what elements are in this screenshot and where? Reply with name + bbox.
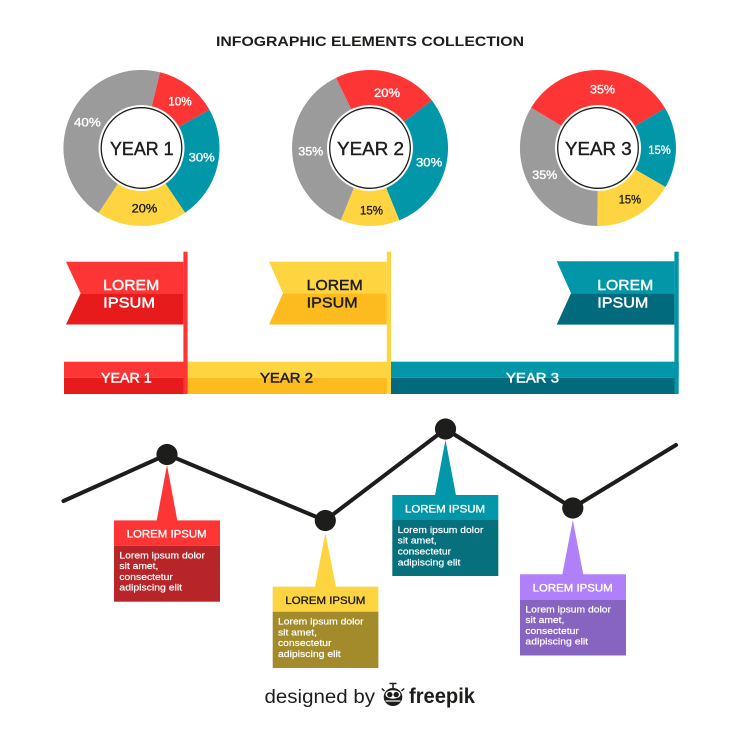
- slice: teal 30%: [142, 110, 220, 213]
- data point 1: [156, 444, 178, 465]
- slice: gray 40%: [63, 70, 160, 213]
- center ring: [327, 105, 413, 191]
- label: 15%: 15%: [360, 204, 383, 218]
- donut chart: year 2: [292, 70, 448, 226]
- label: 30%: 30%: [416, 156, 443, 170]
- label: 40%: 40%: [74, 116, 101, 130]
- flag: year 1: [66, 252, 188, 394]
- designed by text: designed by: [264, 686, 375, 708]
- slice: yellow 15%: [597, 148, 666, 226]
- callout: yellow: adipiscing elit: [278, 649, 341, 659]
- callout: red: consectetur: [119, 572, 173, 582]
- slice: gray 35%: [292, 78, 370, 220]
- label: year 2: YEAR 2: [337, 139, 404, 159]
- callout: teal: [392, 440, 498, 576]
- label: year 3: YEAR 3: [565, 139, 632, 159]
- callout: yellow: [273, 533, 378, 668]
- callout: yellow: consectetur: [278, 638, 331, 648]
- timeline segment: year 3: YEAR 3: [506, 370, 559, 386]
- line chart: [64, 418, 676, 531]
- callout: yellow: sit amet,: [278, 627, 317, 637]
- callout: yellow: Lorem ipsum dolor: [278, 617, 364, 627]
- data point 4: [562, 497, 583, 519]
- label: 20%: 20%: [132, 201, 158, 215]
- donut chart: year 3: [520, 70, 676, 226]
- trend line: [64, 429, 676, 520]
- callout: purple: consectetur: [525, 626, 579, 636]
- label: 35% gray: 35%: [532, 168, 558, 182]
- timeline segment: year 3: [391, 362, 679, 394]
- callout: purple: [520, 520, 626, 656]
- label: 15% yellow: 15%: [619, 192, 641, 206]
- flag: year 1: LOREM: [103, 277, 159, 294]
- label: 30%: 30%: [189, 151, 215, 165]
- footer credit: [264, 684, 475, 708]
- callout: red: sit amet,: [119, 561, 158, 571]
- center ring: [98, 105, 184, 191]
- flag timeline: [64, 252, 679, 394]
- label: year 1: YEAR 1: [110, 139, 174, 159]
- callout: purple: LOREM IPSUM: [533, 583, 613, 595]
- timeline segment: year 2: [188, 362, 391, 394]
- slice: yellow 15%: [341, 148, 399, 226]
- callout: teal: Lorem ipsum dolor: [398, 525, 483, 535]
- flag: year 3: LOREM: [597, 277, 653, 294]
- flag: year 3: IPSUM: [597, 294, 648, 312]
- callout: purple: adipiscing elit: [525, 637, 589, 647]
- callout: red: Lorem ipsum dolor: [119, 550, 205, 560]
- slice: gray 35%: [520, 108, 598, 226]
- label: 35% red: 35%: [590, 82, 616, 96]
- callout: teal: LOREM IPSUM: [405, 503, 485, 515]
- timeline segment: year 2: YEAR 2: [260, 370, 313, 386]
- callout: red: adipiscing elit: [119, 583, 183, 593]
- flag: year 2: LOREM: [307, 277, 363, 294]
- timeline segment: year 1: YEAR 1: [101, 370, 152, 386]
- slice: red 20%: [336, 70, 432, 148]
- slice: red 10%: [142, 72, 209, 148]
- callout: purple: Lorem ipsum dolor: [525, 604, 611, 614]
- callout: teal: sit amet,: [398, 536, 437, 546]
- slice: yellow 20%: [98, 148, 185, 226]
- slice: teal 30%: [370, 100, 448, 220]
- title: INFOGRAPHIC ELEMENTS COLLECTION: [216, 34, 524, 49]
- flag: year 1: IPSUM: [103, 294, 155, 312]
- icon: freepik bee: [382, 684, 404, 706]
- label: 15% teal: 15%: [648, 143, 671, 157]
- callout: red: LOREM IPSUM: [127, 529, 207, 541]
- slice: teal 15%: [598, 108, 676, 187]
- label: 10%: 10%: [168, 95, 192, 109]
- flag: year 2: [269, 252, 391, 394]
- slice: red 35%: [531, 70, 665, 148]
- callout: purple: sit amet,: [525, 615, 564, 625]
- flag: year 2: IPSUM: [307, 294, 358, 312]
- donut chart: year 1: [63, 70, 220, 226]
- label: 35%: 35%: [298, 145, 324, 159]
- flag: year 3: [557, 252, 679, 394]
- callout: teal: consectetur: [398, 546, 451, 556]
- callout: yellow: LOREM IPSUM: [285, 595, 365, 607]
- data point 3: [435, 418, 456, 440]
- freepik wordmark: freepik: [409, 685, 475, 708]
- data point 2: [315, 510, 336, 531]
- label: 20%: 20%: [374, 86, 401, 100]
- callout: teal: adipiscing elit: [398, 557, 461, 567]
- timeline segment: year 1: [64, 362, 188, 394]
- callout: red: [114, 465, 220, 602]
- center ring: [555, 105, 641, 191]
